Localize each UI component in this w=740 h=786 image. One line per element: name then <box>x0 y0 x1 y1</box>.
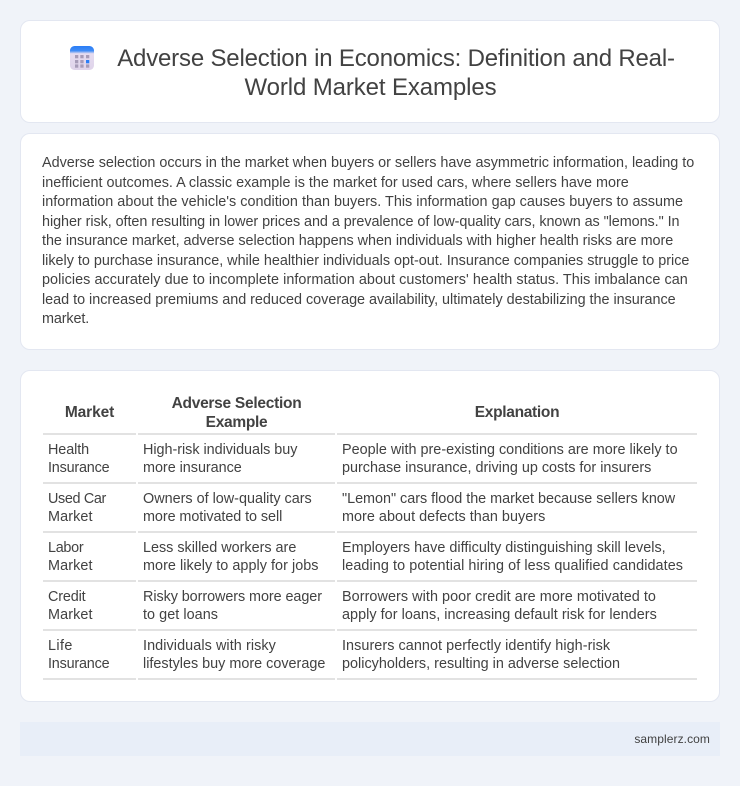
table row: credit market: Market <box>48 607 93 623</box>
table: header row <box>65 395 559 431</box>
icon: calendar <box>70 46 94 70</box>
title: World Market Examples <box>244 74 496 101</box>
table row: labor market: more likely to apply for jobs <box>143 558 319 574</box>
text block: description: the insurance market, adverse selection happens when individuals with higher health risks are more <box>42 233 673 249</box>
text block: description <box>42 155 694 327</box>
panel: description card <box>20 133 720 350</box>
table row: health insurance: High-risk individuals buy <box>143 442 297 458</box>
table row: life insurance: Insurers cannot perfectly identify high-risk <box>342 638 610 654</box>
table row: credit market: Borrowers with poor credit are more motivated to <box>342 589 656 605</box>
table: header row: Market <box>65 404 114 421</box>
text block: description: lead to increased premiums and reduced coverage availability, ultimately destabilizing the insurance <box>42 292 676 308</box>
table row: credit market: Risky borrowers more eager <box>143 589 322 605</box>
table row: labor market: Less skilled workers are <box>143 540 296 556</box>
table row: health insurance: People with pre-existing conditions are more likely to <box>342 442 678 458</box>
text block: description: policies accurately due to incomplete information about customers' health status. This imbalance can <box>42 272 688 288</box>
title <box>117 45 675 101</box>
table row: labor market: leading to potential hiring of less qualified candidates <box>342 558 683 574</box>
text block: description: likely to purchase insurance, while healthier individuals opt-out. Insurance companies struggle to price <box>42 252 689 268</box>
footer text: samplerz.com <box>634 732 710 746</box>
table row: health insurance: purchase insurance, driving up costs for insurers <box>342 460 651 476</box>
footer bar <box>20 722 720 756</box>
table row: life insurance: Insurance <box>48 656 109 672</box>
text block: description: market. <box>42 311 89 327</box>
panel: table card <box>20 370 720 702</box>
table row: used car market: Owners of low-quality cars <box>143 491 312 507</box>
table row: labor market: Labor <box>48 540 83 556</box>
table row: life insurance: policyholders, resulting in adverse selection <box>342 656 620 672</box>
table row: used car market: Market <box>48 509 93 525</box>
table row: used car market: "Lemon" cars flood the market because sellers know <box>342 491 675 507</box>
table row: credit market <box>48 589 657 623</box>
table row: used car market: more about defects than buyers <box>342 509 545 525</box>
table row: used car market <box>48 491 676 525</box>
table row: credit market: to get loans <box>143 607 218 623</box>
table: header row: Example <box>206 414 267 431</box>
table row: labor market: Market <box>48 558 93 574</box>
panel: title card <box>20 20 720 123</box>
table row: life insurance: lifestyles buy more coverage <box>143 656 325 672</box>
title: Adverse Selection in Economics: Definition and Real- <box>117 45 675 72</box>
text block: description: higher risk, often resulting in lower prices and a prevalence of low-quality cars, known as "lemons." In <box>42 214 679 230</box>
table row: used car market: more motivated to sell <box>143 509 282 525</box>
table row: labor market: Employers have difficulty distinguishing skill levels, <box>342 540 666 556</box>
table row: life insurance <box>48 638 620 672</box>
table row: health insurance <box>48 442 678 476</box>
table row: used car market: Used Car <box>48 491 106 507</box>
table row: life insurance: Individuals with risky <box>143 638 276 654</box>
table row: health insurance: more insurance <box>143 460 242 476</box>
table: header row: Adverse Selection <box>172 395 301 412</box>
text block: description: Adverse selection occurs in the market when buyers or sellers have asymmetric information, leading to <box>42 155 694 171</box>
table row: life insurance: Life <box>48 638 73 654</box>
text block: description: inefficient outcomes. A classic example is the market for used cars, where sellers have more <box>42 174 629 190</box>
text block: description: information about the vehicle's condition than buyers. This information gap causes buyers to assume <box>42 194 683 210</box>
table row: credit market: Credit <box>48 589 86 605</box>
table row: labor market <box>48 540 683 574</box>
table row: health insurance: Health <box>48 442 89 458</box>
table: header row: Explanation <box>475 404 559 421</box>
table row: health insurance: Insurance <box>48 460 109 476</box>
table row: credit market: apply for loans, increasing default risk for lenders <box>342 607 657 623</box>
